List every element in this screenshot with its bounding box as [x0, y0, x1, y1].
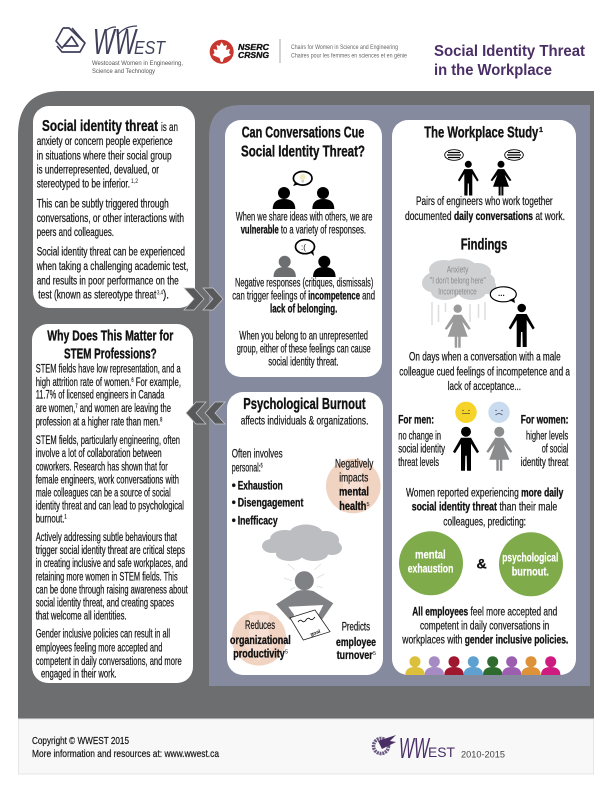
panel: psychological burnout: affects individuals & organizations.: [241, 415, 368, 427]
header: NSERC logo: NSERC: [238, 43, 269, 52]
header: WWEST logo: EST: [134, 38, 167, 58]
panel: why this matters for STEM: 8: [160, 417, 163, 423]
text: for men: no change in: [398, 430, 441, 442]
panel: why this matters for STEM: STEM fields have low representation, and a: [36, 364, 181, 376]
panel: psychological burnout: Psychological Burnout: [243, 396, 366, 413]
list: often involves personal: Disengagement: [238, 497, 304, 509]
title: Social Identity Threat: [434, 43, 585, 60]
header: WWEST logo: WW: [93, 21, 138, 62]
blue-gray content panel: [209, 105, 590, 686]
list: often involves personal: Exhaustion: [238, 480, 283, 492]
panel: definition of social identity threat: anxiety or concern people experience: [37, 136, 173, 148]
callout: predicts employee turnover: [336, 622, 376, 662]
footer: Copyright © WWEST 2015: [32, 735, 129, 747]
panel: can conversations cue social identity threat: Negative responses (critiques, dismissals): [235, 278, 373, 290]
icon: anxiety cloud over woman and man speaking: Anxiety: [447, 265, 469, 276]
callout: psychological burnout: psychological: [502, 553, 558, 565]
icon: WWEST anniversary logo: EST: [428, 744, 455, 760]
panel: why this matters for STEM: can be done through raising awareness about: [36, 584, 188, 596]
panel: why this matters for STEM: female engineers, work conversations with: [36, 474, 179, 486]
icon: thought cloud: [262, 524, 342, 561]
callout: psychological burnout: [499, 532, 563, 596]
panel: definition of social identity threat: This can be subtly triggered through: [37, 198, 169, 210]
panel: definition of social identity threat: Social identity threat: [42, 118, 158, 135]
callout: mental exhaustion: mental: [415, 549, 446, 561]
footer: [18, 719, 594, 774]
callout: reduces organizational productivity: productivity: [233, 649, 285, 661]
callout: reduces organizational productivity: organizational: [230, 635, 291, 647]
panel: why this matters for STEM: trigger social identity threat are critical steps: [36, 545, 185, 557]
text: for women: identity threat: [521, 457, 569, 469]
dark gray background panel: [18, 91, 594, 719]
header: WWEST logo: Westcoast Women in Engineering,: [92, 60, 183, 67]
list: often involves personal: •: [232, 515, 236, 527]
text: for men: For men:: [398, 414, 434, 426]
footer: More information and resources at: www.wwest.ca: [32, 748, 219, 760]
panel: the workplace study and findings: colleagues, predicting:: [443, 517, 526, 529]
text: for men: threat levels: [398, 457, 439, 469]
panel: why this matters for STEM: involve a lot of collaboration between: [36, 448, 162, 460]
panel: why this matters for STEM: 1: [64, 515, 67, 521]
panel: definition of social identity threat: [33, 106, 195, 308]
callout: negatively impacts mental health: 5: [366, 502, 370, 508]
panel: why this matters for STEM: [32, 324, 193, 683]
text: for women: [521, 414, 569, 469]
panel: the workplace study and findings: Findings: [461, 236, 507, 253]
panel: can conversations cue social identity threat: lack of belonging.: [270, 303, 337, 315]
panel: definition of social identity threat: in situations where their social group: [37, 150, 172, 162]
callout: predicts employee turnover: turnover: [337, 650, 373, 662]
panel: the workplace study and findings: The Workplace Study: [424, 125, 538, 142]
panel: can conversations cue social identity threat: Social Identity Threat?: [241, 144, 365, 161]
panel: the workplace study and findings: lack of acceptance...: [448, 381, 521, 393]
list: often involves personal: Inefficacy: [238, 515, 278, 527]
panel: why this matters for STEM: are women,: [36, 403, 96, 415]
list: often involves personal: 5: [261, 464, 263, 470]
arrow: double chevron left: [186, 402, 225, 424]
icon: stressed person with paper: [276, 564, 333, 640]
text: for women: of social: [542, 443, 568, 455]
callout: mental exhaustion: [399, 531, 463, 595]
icon: negative response between two people: [274, 240, 336, 277]
list: often involves personal: [232, 449, 304, 527]
panel: the workplace study and findings: workplaces with gender inclusive policies.: [402, 635, 568, 647]
ampersand: &: [476, 555, 487, 571]
panel: definition of social identity threat: peers and colleagues.: [37, 227, 114, 239]
panel: why this matters for STEM: 7: [75, 404, 78, 410]
panel: why this matters for STEM: Gender inclusive policies can result in all: [36, 628, 170, 640]
panel: the workplace study and findings: competent in daily conversations in: [420, 620, 549, 632]
header: WWEST logo: [56, 21, 183, 75]
callout: negatively impacts mental health: impacts: [339, 473, 368, 485]
list: often involves personal: Often involves: [232, 449, 283, 461]
panel: definition of social identity threat: Social identity threat can be experienced: [37, 246, 185, 258]
panel: the workplace study and findings: social identity threat than their male: [412, 501, 557, 513]
panel: can conversations cue social identity threat: [225, 120, 382, 377]
panel: definition of social identity threat: stereotyped to be inferior.: [37, 178, 130, 190]
panel: why this matters for STEM: retaining more women in STEM fields. This: [36, 571, 178, 583]
panel: why this matters for STEM: For example,: [134, 377, 181, 389]
callout: negatively impacts mental health: health: [339, 501, 366, 513]
panel: definition of social identity threat: 3,4: [157, 290, 163, 296]
panel: definition of social identity threat: conversations, or other interactions with: [37, 213, 184, 225]
panel: the workplace study and findings: All employees feel more accepted and: [412, 607, 557, 619]
panel: why this matters for STEM: male colleagues can be a source of social: [36, 488, 171, 500]
panel: why this matters for STEM: identity threat and can lead to psychological: [36, 501, 184, 513]
panel: why this matters for STEM: social identity threat, and creating spaces: [36, 598, 174, 610]
panel: can conversations cue social identity threat: social identity threat.: [268, 357, 339, 369]
text: for women: For women:: [521, 414, 568, 426]
callout: reduces organizational productivity: 5: [285, 650, 288, 656]
icon: anxiety cloud over woman and man speaking: ...: [498, 289, 505, 298]
icon: negative response between two people: :(: [301, 243, 306, 252]
icon: neutral face and man: [453, 402, 479, 471]
panel: can conversations cue social identity threat: When you belong to an unrepresented: [239, 330, 368, 342]
callout: psychological burnout: burnout.: [512, 566, 549, 578]
icon: stressed person with paper: goal: [310, 629, 322, 638]
list: often involves personal: •: [232, 480, 236, 492]
header: NSERC logo: Chairs for Women in Science and Engineering: [291, 44, 398, 51]
callout: mental exhaustion: exhaustion: [408, 563, 453, 575]
panel: the workplace study and findings: [392, 120, 576, 675]
icon: WWEST anniversary logo: 2010-2015: [461, 750, 505, 760]
list: often involves personal: •: [232, 497, 236, 509]
text: for women: higher levels: [526, 430, 568, 442]
icon: man and woman with speech bubbles: [445, 150, 523, 196]
panel: can conversations cue social identity threat: group, either of these feelings can cause: [237, 344, 371, 356]
icon: row of diverse employees: [405, 656, 560, 675]
callout: predicts employee turnover: 5: [373, 651, 376, 657]
panel: why this matters for STEM: employees feeling more accepted and: [36, 643, 162, 655]
callout: reduces organizational productivity: Reduces: [245, 620, 275, 632]
panel: definition of social identity threat: is underrepresented, devalued, or: [37, 164, 159, 176]
panel: why this matters for STEM: Actively addressing subtle behaviours that: [36, 532, 178, 544]
icon: WWEST anniversary logo: WW: [399, 733, 430, 765]
panel: why this matters for STEM: burnout.: [36, 514, 78, 526]
list: often involves personal: personal:: [232, 463, 279, 475]
text: for men: social identity: [398, 443, 445, 455]
callout: negatively impacts mental health: mental: [339, 487, 369, 499]
panel: why this matters for STEM: profession at a higher rate than men.: [36, 416, 224, 428]
panel: why this matters for STEM: STEM Professions?: [64, 346, 157, 362]
panel: why this matters for STEM: 6: [131, 378, 134, 384]
panel: definition of social identity threat: and results in poor performance on the: [37, 275, 179, 287]
title: in the Workplace: [434, 62, 552, 79]
text: for men: [398, 414, 445, 469]
icon: WWEST anniversary logo: [374, 733, 505, 765]
callout: negatively impacts mental health: Negatively: [335, 458, 373, 470]
panel: why this matters for STEM: coworkers. Research has shown that for: [36, 461, 168, 473]
panel: why this matters for STEM: Why Does This Matter for: [47, 329, 174, 345]
panel: can conversations cue social identity threat: can trigger feelings of incompetence and: [232, 290, 375, 302]
panel: definition of social identity threat: when taking a challenging academic test,: [36, 261, 188, 273]
icon: anxiety cloud over woman and man speaking: Incompetence: [438, 286, 477, 297]
panel: why this matters for STEM: and women are leaving the: [78, 403, 171, 415]
title: [434, 43, 585, 79]
panel: why this matters for STEM: STEM fields, particularly engineering, often: [36, 435, 180, 447]
panel: definition of social identity threat: 1,2: [131, 179, 139, 185]
panel: definition of social identity threat: is an: [161, 122, 178, 134]
icon: anxiety cloud over woman and man speaking: "I don't belong here": [430, 275, 486, 286]
header: NSERC logo: [210, 39, 407, 64]
icon: sad face and woman: [486, 402, 512, 471]
header: NSERC logo: CRSNG: [238, 51, 269, 60]
panel: can conversations cue social identity threat: When we share ideas with others, we are: [236, 212, 372, 224]
panel: the workplace study and findings: Women reported experiencing more daily: [406, 488, 564, 500]
icon: two people sharing an idea: [273, 172, 334, 209]
callout: predicts employee turnover: employee: [336, 637, 376, 649]
panel: can conversations cue social identity threat: vulnerable to a variety of responses.: [241, 224, 366, 236]
panel: why this matters for STEM: 11.7% of licensed engineers in Canada: [36, 390, 165, 402]
callout: negatively impacts mental health: [326, 458, 381, 513]
panel: the workplace study and findings: 1: [539, 127, 543, 134]
panel: the workplace study and findings: Pairs of engineers who work together: [416, 196, 553, 208]
panel: psychological burnout: [227, 392, 383, 675]
icon: anxiety cloud over woman and man speaking: [422, 258, 535, 348]
header: NSERC logo: Chaires pour les femmes en sciences et en génie: [291, 53, 407, 60]
panel: why this matters for STEM: in creating inclusive and safe workplaces, and: [36, 558, 188, 570]
panel: can conversations cue social identity threat: Can Conversations Cue: [242, 125, 364, 142]
panel: the workplace study and findings: documented daily conversations at work.: [405, 211, 565, 223]
arrow: double chevron right: [184, 288, 223, 310]
panel: why this matters for STEM: that welcome all identities.: [36, 611, 127, 623]
header: WWEST logo: Science and Technology: [92, 68, 156, 75]
panel: why this matters for STEM: competent in daily conversations, and more: [36, 656, 182, 668]
panel: why this matters for STEM: engaged in their work.: [41, 669, 117, 681]
callout: predicts employee turnover: Predicts: [342, 622, 370, 634]
panel: definition of social identity threat: test (known as stereotype threat: [38, 290, 157, 302]
panel: definition of social identity threat: ).: [163, 290, 169, 302]
panel: why this matters for STEM: high attrition rate of women.: [36, 377, 178, 389]
callout: reduces organizational productivity: [230, 611, 291, 666]
